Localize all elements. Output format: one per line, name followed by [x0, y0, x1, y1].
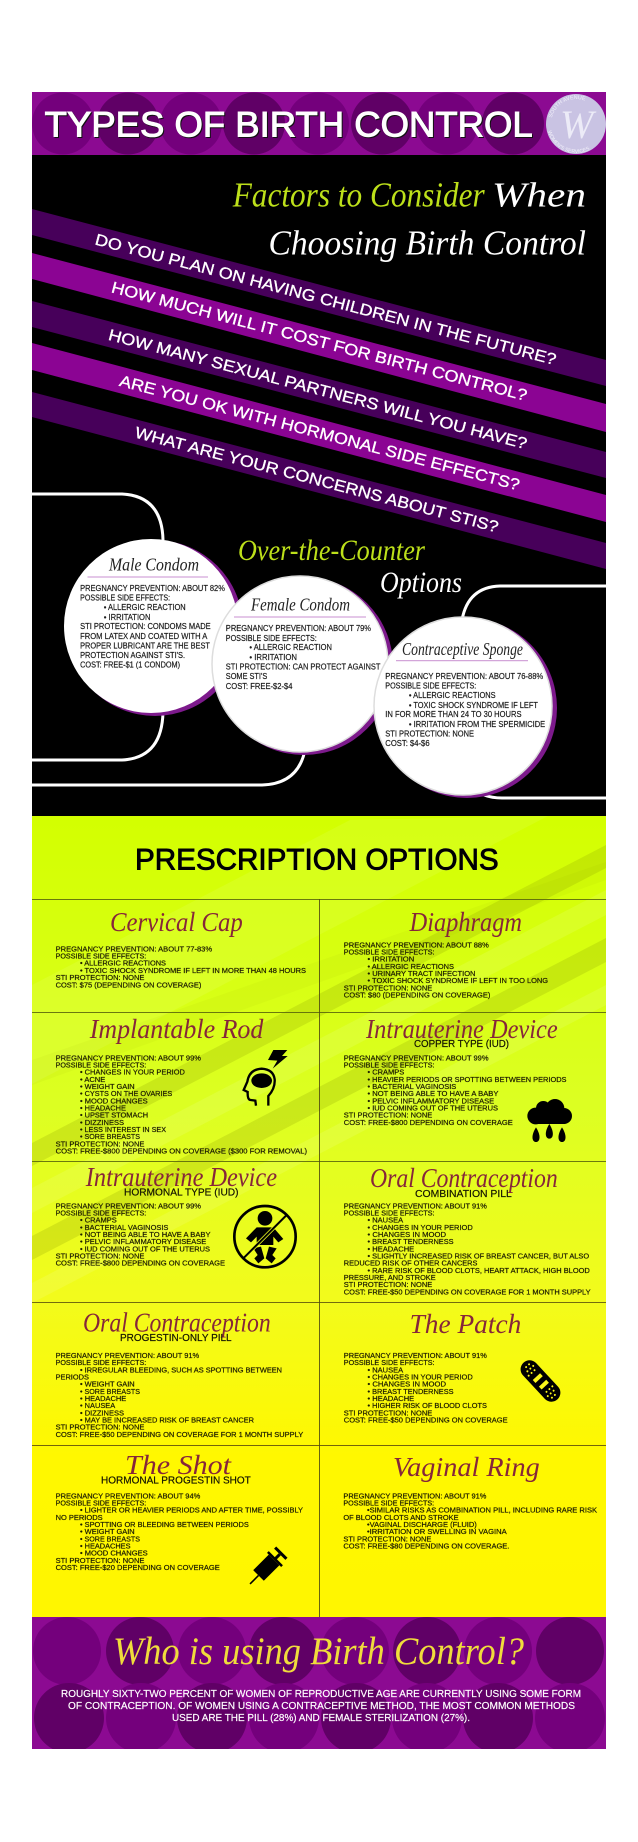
cell: implantable rod: POSSIBLE SIDE EFFECTS:	[56, 1060, 146, 1070]
cell: diaphragm: • URINARY TRACT INFECTION	[368, 969, 476, 978]
cell: oral contraception, progestin-only pill	[56, 1308, 303, 1439]
cell: intrauterine device, hormonal type: STI PROTECTION: NONE	[56, 1252, 144, 1260]
cell: intrauterine device, copper type: COST: FREE-$800 DEPENDING ON COVERAGE	[344, 1118, 513, 1127]
circle: male condom: Male Condom	[108, 555, 199, 575]
cell: diaphragm	[344, 907, 548, 1000]
cell: intrauterine device, copper type: • PELVIC INFLAMMATORY DISEASE	[368, 1096, 494, 1105]
logo: South Avenue Women's Services	[546, 94, 606, 154]
cell: intrauterine device, copper type: • NOT BEING ABLE TO HAVE A BABY	[368, 1089, 498, 1098]
cell: oral contraception, progestin-only pill: • MAY BE INCREASED RISK OF BREAST CANCER	[80, 1416, 254, 1424]
circle: contraceptive sponge: • ALLERGIC REACTIONS	[409, 690, 496, 700]
circle: female condom	[212, 576, 393, 755]
heading: factors to consider	[232, 176, 586, 262]
cell: intrauterine device, hormonal type: • BACTERIAL VAGINOSIS	[80, 1223, 168, 1232]
diagonal question bands	[32, 209, 606, 569]
cell: oral contraception, combination pill: • RARE RISK OF BLOOD CLOTS, HEART ATTACK, HIGH BLOOD	[368, 1266, 590, 1275]
circle: female condom: • ALLERGIC REACTION	[249, 642, 332, 652]
heading: factors to consider: Choosing Birth Control	[268, 223, 586, 262]
icon: crossed-out baby	[234, 1206, 296, 1267]
cell: the shot: • HEADACHES	[80, 1542, 131, 1550]
cell: vaginal ring: •IRRITATION OR SWELLING IN VAGINA	[367, 1527, 507, 1536]
paragraph: USED ARE THE PILL (28%) AND FEMALE STERILIZATION (27%).	[172, 1713, 470, 1724]
cell: diaphragm: • TOXIC SHOCK SYNDROME IF LEFT IN TOO LONG	[368, 976, 548, 985]
circle: female condom: STI PROTECTION: CAN PROTECT AGAINST	[226, 662, 381, 672]
icon: syringe	[243, 1545, 289, 1591]
cell: the shot: NO PERIODS	[56, 1513, 103, 1522]
cell: the patch: • HIGHER RISK OF BLOOD CLOTS	[368, 1401, 487, 1410]
cell: cervical cap: • TOXIC SHOCK SYNDROME IF LEFT IN MORE THAN 48 HOURS	[80, 966, 306, 975]
cell: oral contraception, combination pill: STI PROTECTION: NONE	[344, 1280, 432, 1289]
cell: diaphragm: • IRRITATION	[368, 955, 414, 964]
circle: male condom	[64, 539, 243, 716]
icon: head with lightning bolt	[244, 1050, 288, 1106]
circle: male condom: • ALLERGIC REACTION	[104, 602, 186, 612]
question 2: HOW MUCH WILL IT COST FOR BIRTH CONTROL?	[110, 280, 529, 405]
cell: oral contraception, combination pill: • CHANGES IN YOUR PERIOD	[368, 1223, 473, 1232]
paragraph: OF CONTRACEPTION. OF WOMEN USING A CONTRACEPTIVE METHOD, THE MOST COMMON METHODS	[68, 1701, 575, 1712]
cell: the shot	[56, 1450, 303, 1591]
cell: implantable rod: • DIZZINESS	[80, 1118, 124, 1127]
header circle pattern	[32, 92, 544, 154]
cell: cervical cap: PREGNANCY PREVENTION: ABOUT 77-83%	[56, 944, 213, 953]
circle: contraceptive sponge: IN FOR MORE THAN 24 TO 30 HOURS	[385, 709, 522, 719]
cell: intrauterine device, hormonal type: • NOT BEING ABLE TO HAVE A BABY	[80, 1230, 211, 1239]
cell: oral contraception, progestin-only pill: • HEADACHE	[80, 1394, 126, 1403]
cell: intrauterine device, hormonal type: HORMONAL TYPE (IUD)	[124, 1188, 238, 1198]
footer circle pattern	[0, 1617, 638, 1789]
cell: intrauterine device, copper type: • HEAVIER PERIODS OR SPOTTING BETWEEN PERIODS	[368, 1075, 567, 1084]
cell: oral contraception, progestin-only pill: Oral Contraception	[83, 1308, 271, 1338]
cell: implantable rod: • HEADACHE	[80, 1104, 126, 1112]
cell: intrauterine device, copper type	[344, 1014, 572, 1142]
circle: male condom: • IRRITATION	[104, 612, 150, 622]
cell: the patch: COST: FREE-$50 DEPENDING ON COVERAGE	[344, 1416, 508, 1424]
cell: oral contraception, combination pill: • SLIGHTLY INCREASED RISK OF BREAST CANCER, BUT ALSO	[368, 1252, 589, 1260]
cell: oral contraception, progestin-only pill: • WEIGHT GAIN	[80, 1380, 135, 1389]
cell: diaphragm: PREGNANCY PREVENTION: ABOUT 88%	[344, 940, 489, 949]
circle: contraceptive sponge: POSSIBLE SIDE EFFECTS:	[385, 680, 476, 690]
cell: vaginal ring: •SIMILAR RISKS AS COMBINATION PILL, INCLUDING RARE RISK	[367, 1506, 597, 1515]
cell: oral contraception, progestin-only pill: • DIZZINESS	[80, 1408, 124, 1417]
cell: oral contraception, combination pill: POSSIBLE SIDE EFFECTS:	[344, 1208, 434, 1218]
cell: oral contraception, combination pill	[344, 1163, 591, 1296]
paragraph	[61, 1689, 581, 1724]
cell: implantable rod: STI PROTECTION: NONE	[56, 1139, 144, 1148]
cell: oral contraception, combination pill: COMBINATION PILL	[415, 1189, 512, 1200]
cell: intrauterine device, copper type: PREGNANCY PREVENTION: ABOUT 99%	[344, 1053, 489, 1062]
cell: the shot: COST: FREE-$20 DEPENDING ON COVERAGE	[56, 1563, 220, 1572]
cell: implantable rod	[56, 1014, 307, 1156]
cell: cervical cap	[56, 907, 306, 989]
cell: oral contraception, progestin-only pill: PERIODS	[56, 1372, 89, 1382]
cell: vaginal ring: COST: FREE-$80 DEPENDING ON COVERAGE.	[343, 1542, 509, 1550]
heading: prescription options: PRESCRIPTION OPTIONS	[135, 843, 499, 876]
question 3: HOW MANY SEXUAL PARTNERS WILL YOU HAVE?	[107, 327, 529, 453]
title: TYPES OF BIRTH CONTROL	[45, 106, 533, 144]
cell: diaphragm: POSSIBLE SIDE EFFECTS:	[344, 948, 434, 956]
heading: over-the-counter options	[238, 534, 462, 599]
cell: implantable rod: • LESS INTEREST IN SEX	[80, 1125, 166, 1134]
cell: the shot: The Shot	[125, 1450, 233, 1480]
cell: the patch: • BREAST TENDERNESS	[368, 1387, 454, 1396]
cell: diaphragm: Diaphragm	[409, 907, 522, 937]
cell: the shot: STI PROTECTION: NONE	[56, 1556, 144, 1565]
cell: oral contraception, combination pill: • CHANGES IN MOOD	[368, 1230, 446, 1239]
cell: implantable rod: • UPSET STOMACH	[80, 1111, 148, 1120]
cell: the patch: The Patch	[410, 1309, 521, 1339]
cell: implantable rod: • MOOD CHANGES	[80, 1096, 148, 1105]
circle: male condom: POSSIBLE SIDE EFFECTS:	[80, 592, 170, 602]
cell: the patch: POSSIBLE SIDE EFFECTS:	[344, 1358, 434, 1367]
cell: oral contraception, combination pill: • NAUSEA	[368, 1216, 403, 1225]
cell: oral contraception, combination pill: • BREAST TENDERNESS	[368, 1237, 454, 1246]
cell: oral contraception, progestin-only pill: • IRREGULAR BLEEDING, SUCH AS SPOTTING BETWEEN	[80, 1365, 282, 1374]
cell: the shot: HORMONAL PROGESTIN SHOT	[101, 1476, 251, 1486]
cell: oral contraception, combination pill: PREGNANCY PREVENTION: ABOUT 91%	[344, 1201, 487, 1210]
circle: male condom: PROPER LUBRICANT ARE THE BEST	[80, 640, 211, 650]
cell: intrauterine device, hormonal type: PREGNANCY PREVENTION: ABOUT 99%	[56, 1201, 201, 1210]
cell: the shot: POSSIBLE SIDE EFFECTS:	[56, 1498, 146, 1508]
cell: intrauterine device, copper type: • IUD COMING OUT OF THE UTERUS	[368, 1104, 498, 1112]
cell: oral contraception, progestin-only pill: • NAUSEA	[80, 1401, 115, 1410]
cell: the patch: • HEADACHE	[368, 1394, 414, 1403]
cell: oral contraception, progestin-only pill: STI PROTECTION: NONE	[56, 1423, 144, 1432]
cell: the patch: STI PROTECTION: NONE	[344, 1408, 432, 1417]
circle: female condom: Female Condom	[250, 595, 350, 615]
circle: female condom: • IRRITATION	[249, 652, 297, 662]
cell: the patch: PREGNANCY PREVENTION: ABOUT 91%	[344, 1351, 487, 1360]
cell: the shot: PREGNANCY PREVENTION: ABOUT 94%	[56, 1491, 201, 1500]
cell: vaginal ring	[343, 1452, 597, 1550]
cell: implantable rod: • WEIGHT GAIN	[80, 1082, 135, 1091]
cell: oral contraception, progestin-only pill: PREGNANCY PREVENTION: ABOUT 91%	[56, 1351, 200, 1360]
circle: contraceptive sponge: PREGNANCY PREVENTION: ABOUT 76-88%	[385, 671, 544, 681]
cell: the shot: • WEIGHT GAIN	[80, 1527, 135, 1536]
cell: intrauterine device, copper type: POSSIBLE SIDE EFFECTS:	[344, 1060, 434, 1070]
prescription options panel	[32, 816, 606, 1617]
cell: vaginal ring: Vaginal Ring	[393, 1452, 540, 1482]
header banner	[32, 92, 606, 155]
cell: vaginal ring: •VAGINAL DISCHARGE (FLUID)	[367, 1520, 477, 1529]
cell: implantable rod: • ACNE	[80, 1075, 105, 1084]
cell: oral contraception, combination pill: • HEADACHE	[368, 1244, 414, 1253]
cell: vaginal ring: OF BLOOD CLOTS AND STROKE	[343, 1513, 459, 1522]
cell: diaphragm: COST: $80 (DEPENDING ON COVERAGE)	[344, 990, 490, 1000]
cell: oral contraception, combination pill: Oral Contraception	[370, 1163, 558, 1193]
cell: the shot: • SPOTTING OR BLEEDING BETWEEN PERIODS	[80, 1520, 249, 1529]
cell: intrauterine device, hormonal type: • PELVIC INFLAMMATORY DISEASE	[80, 1237, 206, 1246]
cell: intrauterine device, copper type: STI PROTECTION: NONE	[344, 1111, 432, 1120]
cell: vaginal ring: PREGNANCY PREVENTION: ABOUT 91%	[343, 1491, 487, 1500]
cell: intrauterine device, copper type: • CRAMPS	[368, 1068, 404, 1077]
cell: the shot: • SORE BREASTS	[80, 1534, 140, 1543]
cell: implantable rod: COST: FREE-$800 DEPENDING ON COVERAGE ($300 FOR REMOVAL)	[56, 1146, 307, 1156]
question 4: ARE YOU OK WITH HORMONAL SIDE EFFECTS?	[118, 373, 521, 494]
cell: the shot: • MOOD CHANGES	[80, 1549, 148, 1558]
question 1: DO YOU PLAN ON HAVING CHILDREN IN THE FUTURE?	[93, 232, 558, 369]
cell: intrauterine device, hormonal type: COST: FREE-$800 DEPENDING ON COVERAGE	[56, 1259, 225, 1268]
circle: female condom: PREGNANCY PREVENTION: ABOUT 79%	[226, 623, 371, 633]
cell: cervical cap: STI PROTECTION: NONE	[56, 973, 144, 982]
cell: intrauterine device, hormonal type: Intrauterine Device	[85, 1162, 277, 1192]
paragraph: ROUGHLY SIXTY-TWO PERCENT OF WOMEN OF REPRODUCTIVE AGE ARE CURRENTLY USING SOME FORM	[61, 1689, 581, 1700]
cell: implantable rod: • SORE BREASTS	[80, 1132, 140, 1141]
cell: oral contraception, combination pill: REDUCED RISK OF OTHER CANCERS	[344, 1259, 477, 1268]
logo: South Avenue Women's Services: W	[560, 102, 597, 147]
logo: South Avenue Women's Services: WOMEN'S SERVICES	[548, 130, 590, 153]
cell: oral contraception, progestin-only pill: POSSIBLE SIDE EFFECTS:	[56, 1358, 146, 1367]
circle: male condom: PROTECTION AGAINST STI'S.	[80, 650, 185, 660]
cell: oral contraception, progestin-only pill: COST: FREE-$50 DEPENDING ON COVERAGE FOR 1 MONTH SUPPLY	[56, 1430, 303, 1439]
icon: rain cloud	[527, 1099, 572, 1142]
logo: South Avenue Women's Services: SOUTH AVENUE	[548, 95, 586, 118]
cell: cervical cap: Cervical Cap	[110, 907, 243, 937]
diagonal background stripes	[32, 816, 606, 1303]
circle: contraceptive sponge: • TOXIC SHOCK SYNDROME IF LEFT	[409, 700, 539, 710]
cell: the patch: • CHANGES IN MOOD	[368, 1380, 446, 1389]
cell: intrauterine device, copper type: Intrauterine Device	[365, 1014, 558, 1044]
circle: male condom: COST: FREE-$1 (1 CONDOM)	[80, 660, 180, 670]
cell: vaginal ring: POSSIBLE SIDE EFFECTS:	[343, 1498, 434, 1508]
cell: implantable rod: Implantable Rod	[89, 1014, 264, 1044]
cell: the patch	[344, 1309, 564, 1424]
circle: female condom: SOME STI'S	[226, 671, 268, 681]
heading: over-the-counter options: Over-the-Counter	[238, 534, 425, 567]
cell: cervical cap: POSSIBLE SIDE EFFECTS:	[56, 952, 146, 960]
circle: contraceptive sponge: COST: $4-$6	[385, 738, 430, 748]
cell: vaginal ring: STI PROTECTION: NONE	[343, 1534, 431, 1543]
black factors and over-the-counter panel	[32, 155, 606, 816]
cell: oral contraception, progestin-only pill: • SORE BREASTS	[80, 1387, 140, 1396]
cell: the patch: • CHANGES IN YOUR PERIOD	[368, 1372, 473, 1382]
cell: implantable rod: • CYSTS ON THE OVARIES	[80, 1089, 172, 1098]
grid lines	[32, 899, 606, 1617]
cell: oral contraception, combination pill: PRESSURE, AND STROKE	[344, 1273, 436, 1282]
who is using birth control panel	[0, 1617, 638, 1789]
cell: intrauterine device, hormonal type	[56, 1162, 296, 1268]
cell: intrauterine device, copper type: COPPER TYPE (IUD)	[414, 1039, 509, 1050]
circle: male condom: STI PROTECTION: CONDOMS MADE	[80, 621, 211, 631]
cell: diaphragm: • ALLERGIC REACTIONS	[368, 962, 454, 971]
cell: intrauterine device, hormonal type: • CRAMPS	[80, 1216, 117, 1225]
circle: male condom: FROM LATEX AND COATED WITH A	[80, 631, 208, 641]
cell: the patch: • NAUSEA	[368, 1365, 403, 1374]
heading: who is using birth control: Who is using Birth Control?	[113, 1630, 524, 1673]
cell: cervical cap: • ALLERGIC REACTIONS	[80, 959, 166, 968]
question 5: WHAT ARE YOUR CONCERNS ABOUT STIS?	[133, 425, 500, 536]
cell: the shot: • LIGHTER OR HEAVIER PERIODS AND AFTER TIME, POSSIBLY	[80, 1506, 303, 1515]
circle: female condom: POSSIBLE SIDE EFFECTS:	[226, 633, 317, 643]
cell: intrauterine device, hormonal type: • IUD COMING OUT OF THE UTERUS	[80, 1244, 210, 1253]
circle: contraceptive sponge: Contraceptive Sponge	[402, 639, 523, 659]
icon: adhesive bandage patch	[517, 1357, 564, 1405]
heading: factors to consider: Factors to Consider	[232, 176, 485, 215]
circle: contraceptive sponge	[374, 617, 557, 798]
cell: diaphragm: STI PROTECTION: NONE	[344, 983, 432, 992]
circle: male condom: PREGNANCY PREVENTION: ABOUT 82%	[80, 583, 225, 593]
cell: cervical cap: COST: $75 (DEPENDING ON COVERAGE)	[56, 980, 201, 989]
cell: intrauterine device, hormonal type: POSSIBLE SIDE EFFECTS:	[56, 1208, 146, 1218]
heading: factors to consider: When	[492, 176, 586, 215]
cell: intrauterine device, copper type: • BACTERIAL VAGINOSIS	[368, 1082, 456, 1091]
heading: over-the-counter options: Options	[380, 566, 462, 599]
circle: contraceptive sponge: • IRRITATION FROM THE SPERMICIDE	[409, 719, 545, 729]
connector lines	[32, 494, 606, 798]
circle: female condom: COST: FREE-$2-$4	[226, 681, 293, 691]
circle: contraceptive sponge: STI PROTECTION: NONE	[385, 728, 474, 738]
cell: oral contraception, combination pill: COST: FREE-$50 DEPENDING ON COVERAGE FOR 1 MONTH SUPPLY	[344, 1287, 591, 1296]
cell: oral contraception, progestin-only pill: PROGESTIN-ONLY PILL	[120, 1333, 232, 1344]
cell: implantable rod: PREGNANCY PREVENTION: ABOUT 99%	[56, 1053, 201, 1062]
cell: implantable rod: • CHANGES IN YOUR PERIOD	[80, 1068, 185, 1077]
